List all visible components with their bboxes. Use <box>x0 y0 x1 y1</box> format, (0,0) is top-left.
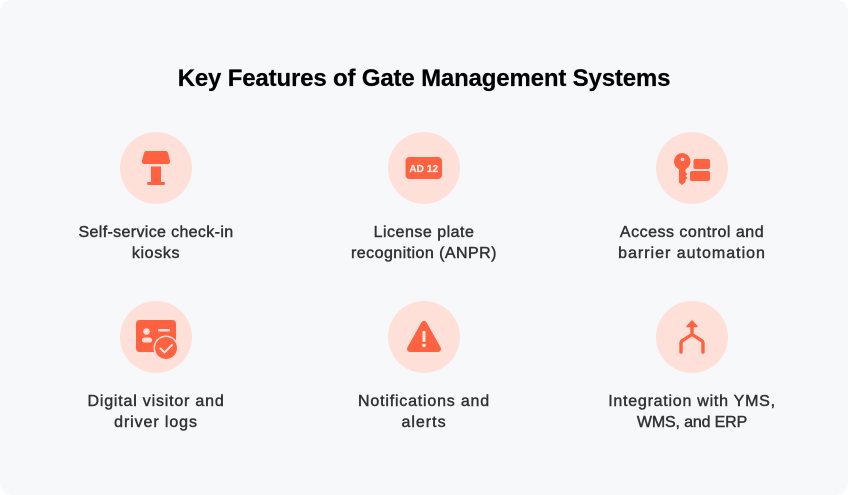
label: visitor logs: driver logs <box>114 414 198 431</box>
icon: kiosk lamp <box>120 132 192 204</box>
icon: visitor log card with check <box>120 301 192 373</box>
label: access control <box>618 224 766 262</box>
label: integration <box>608 393 776 431</box>
label: visitor logs <box>87 393 225 431</box>
label: license plate recognition: License plate <box>374 224 474 241</box>
icon: warning triangle <box>388 301 460 373</box>
label: access control: Access control and <box>620 224 764 241</box>
icon: license plate <box>388 132 460 204</box>
title: Key Features of Gate Management Systems <box>178 65 670 92</box>
label: self-service kiosks: kiosks <box>132 245 180 262</box>
label: self-service kiosks <box>79 224 233 262</box>
label: access control: barrier automation <box>618 245 766 262</box>
icon: merge arrow <box>656 301 728 373</box>
label: notifications: alerts <box>401 414 447 431</box>
label: license plate recognition: recognition (ANPR) <box>351 245 497 262</box>
label: license plate recognition <box>351 224 497 262</box>
label: notifications: Notifications and <box>358 393 490 410</box>
icon: license plate: AD 12 <box>409 164 439 175</box>
label: notifications <box>358 393 490 431</box>
label: integration: WMS, and ERP <box>637 414 747 431</box>
label: self-service kiosks: Self-service check-in <box>79 224 233 241</box>
label: visitor logs: Digital visitor and <box>87 393 225 410</box>
label: integration: Integration with YMS, <box>608 393 776 410</box>
icon: key and barrier <box>656 132 728 204</box>
